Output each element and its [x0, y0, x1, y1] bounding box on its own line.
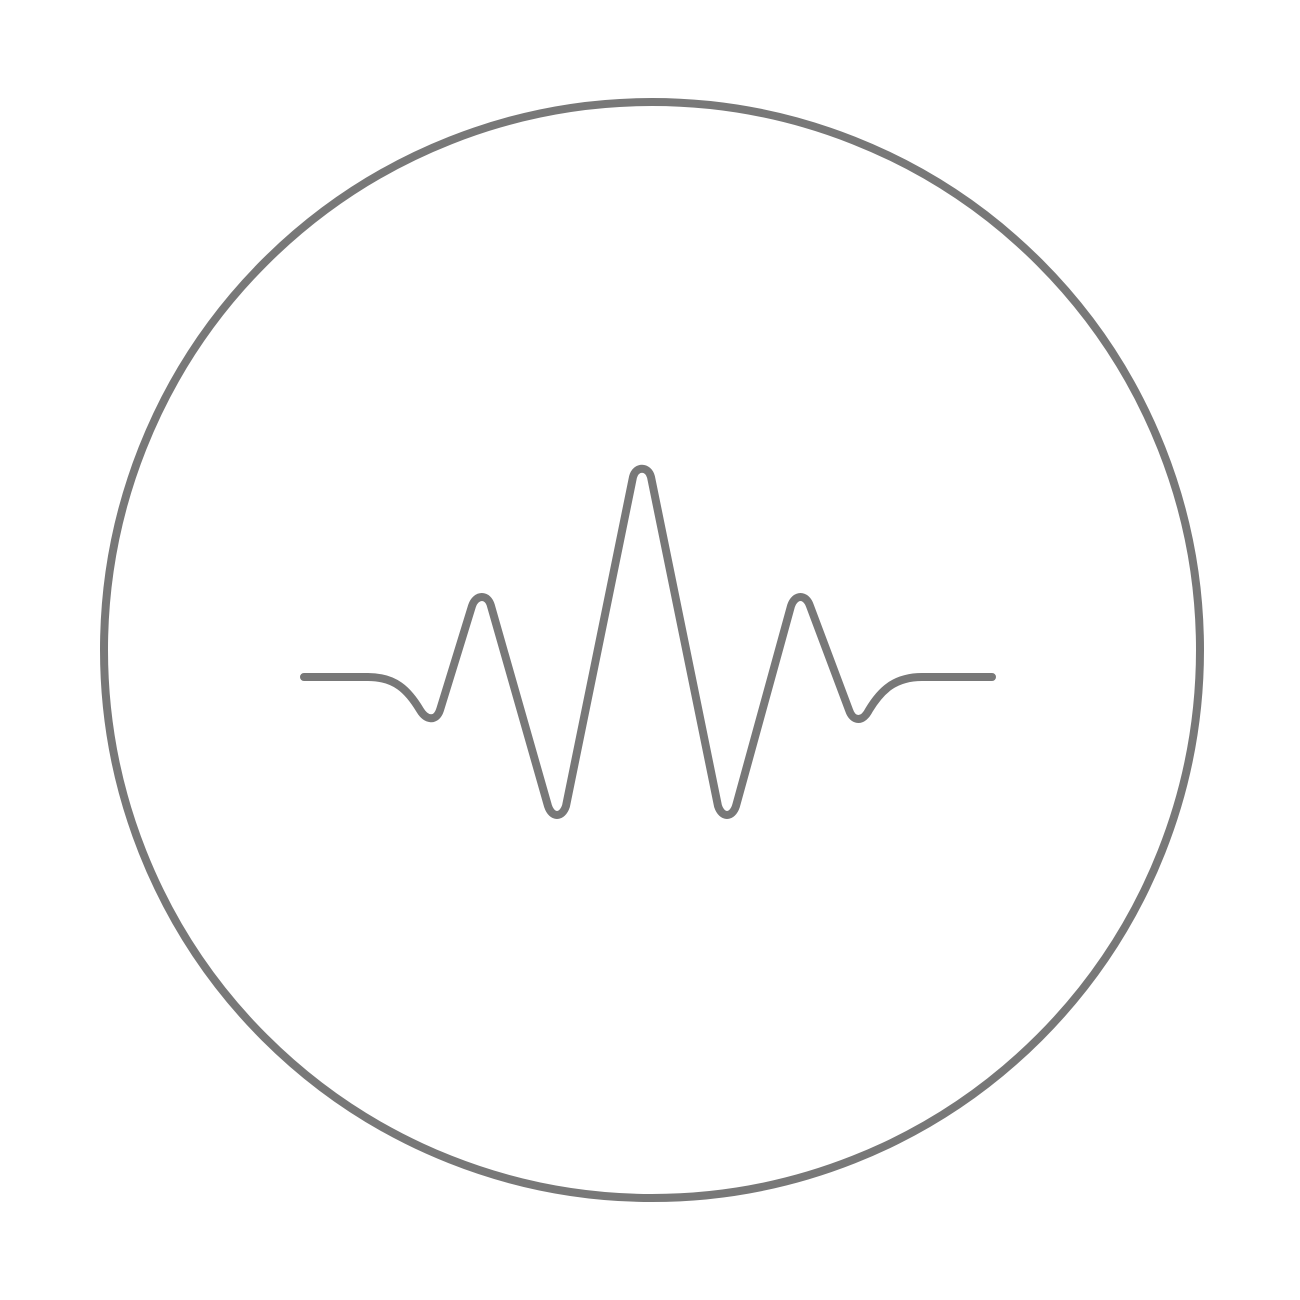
circle outline [104, 102, 1200, 1198]
sound wave line [304, 469, 992, 815]
